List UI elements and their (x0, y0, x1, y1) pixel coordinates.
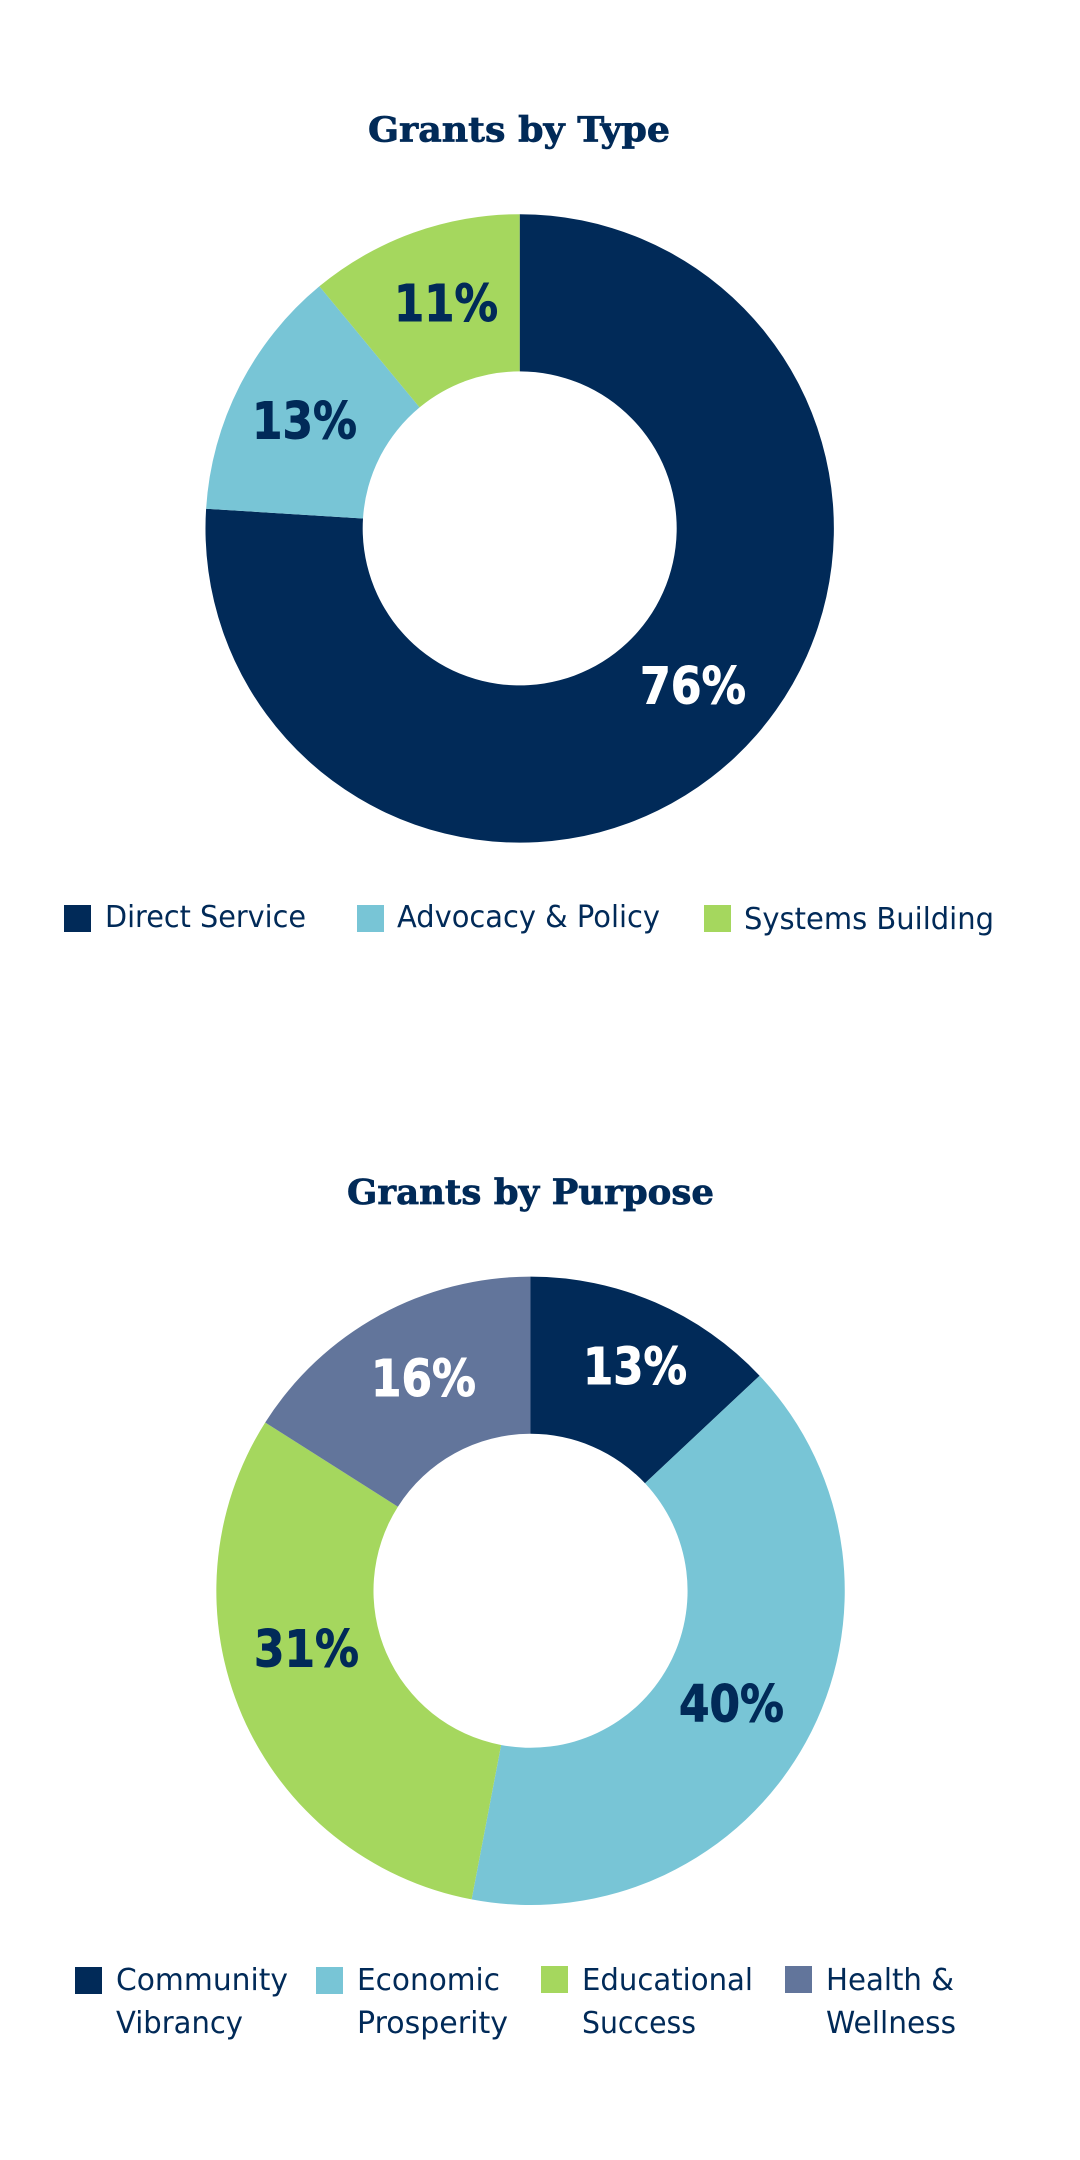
legend item: health and wellness: Wellness (826, 2006, 956, 2041)
legend item: economic prosperity (316, 1963, 508, 2041)
title: grants by type: Grants by Type (368, 110, 670, 150)
segment: systems building 11% (319, 214, 520, 407)
legend: grants by type (64, 900, 994, 937)
value label: 16%: 16% (371, 1350, 476, 1409)
panel: grants by type (64, 110, 994, 937)
legend item: economic prosperity: Economic (357, 1963, 500, 1998)
legend item: direct service: Direct Service (105, 900, 306, 935)
segment: educational success 31% (216, 1422, 501, 1899)
legend item: economic prosperity: Prosperity (357, 2006, 508, 2041)
donut chart: grants by type (205, 214, 834, 843)
value label: 11%: 11% (394, 275, 498, 334)
value label: 31%: 31% (254, 1620, 359, 1680)
legend item: educational success (541, 1963, 753, 2041)
legend item: systems building: Systems Building (744, 902, 994, 937)
legend item: community vibrancy (75, 1963, 288, 2041)
donut chart: grants by purpose (216, 1277, 845, 1905)
value label: 76%: 76% (640, 658, 746, 716)
value label: 13%: 13% (583, 1338, 687, 1397)
legend item: health and wellness (785, 1963, 956, 2041)
legend item: community vibrancy: Vibrancy (116, 2006, 243, 2041)
segment: economic prosperity 40% (472, 1376, 845, 1905)
title: grants by purpose: Grants by Purpose (347, 1172, 714, 1213)
value label: 40%: 40% (679, 1676, 784, 1734)
segment: community vibrancy 13% (530, 1277, 760, 1483)
legend item: educational success: Success (582, 2006, 696, 2041)
segment: advocacy and policy 13% (206, 286, 420, 518)
legend: grants by purpose (75, 1963, 956, 2041)
segment: health and wellness 16% (265, 1277, 530, 1507)
legend item: health and wellness: Health & (826, 1963, 954, 1998)
value label: 13%: 13% (252, 392, 357, 452)
legend item: community vibrancy: Community (116, 1963, 288, 1998)
legend item: advocacy and policy: Advocacy & Policy (397, 900, 660, 935)
panel: grants by purpose (75, 1172, 956, 2041)
legend item: educational success: Educational (582, 1963, 753, 1998)
segment: direct service 76% (205, 214, 834, 843)
